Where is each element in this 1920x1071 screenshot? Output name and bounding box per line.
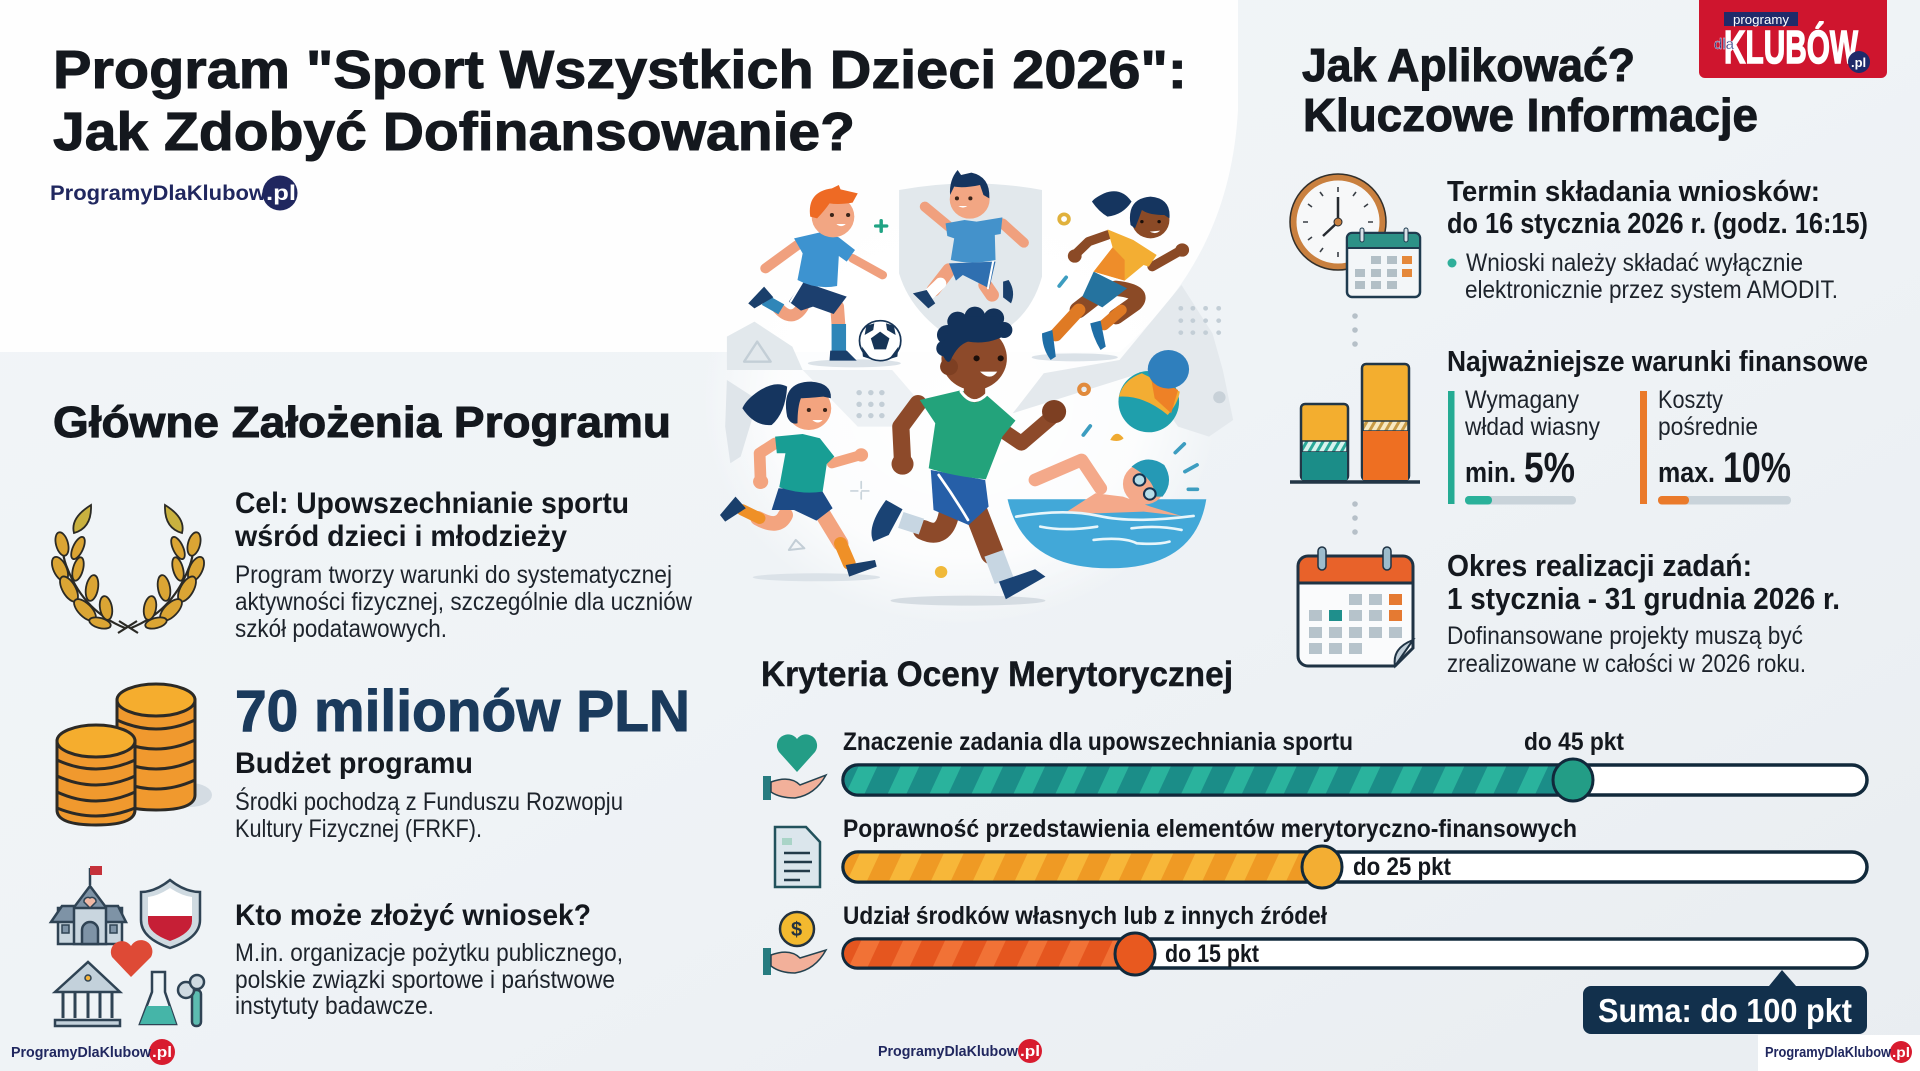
criterion: udział środków (763, 902, 1867, 975)
logo: Programy dla Klubów red badge: programy (1733, 12, 1789, 27)
child: boy centre top (913, 170, 1024, 308)
criterion: znaczenie zadania: do 45 pkt (1524, 728, 1625, 756)
icon: coin in hand: $ (791, 919, 802, 941)
text block: budżet: Środki pochodzą z Funduszu Rozwopju (235, 786, 623, 816)
icon: eligible institutions (51, 866, 204, 1026)
criterion: udział środków: Udział środków własnych lub z innych źródeł (843, 902, 1327, 930)
text block: okres realizacji: Dofinansowane projekty muszą być (1447, 622, 1803, 650)
text block: cel programu: aktywności fizycznej, szczególnie dla uczniów (235, 588, 693, 616)
card: koszty pośrednie (1640, 386, 1791, 504)
logo: ProgramyDlaKlubow.pl top: ProgramyDlaKlubow (50, 182, 267, 205)
icon: school (51, 866, 126, 944)
card: koszty pośrednie: 10% (1723, 444, 1791, 492)
text block: okres realizacji: 1 stycznia - 31 grudnia 2026 r. (1447, 581, 1840, 616)
text block: termin składania wniosków (1447, 176, 1868, 304)
icon: heart in hand (763, 734, 826, 800)
heading: Jak aplikować (1302, 39, 1758, 141)
text block: cel programu: Program tworzy warunki do systematycznej (235, 561, 672, 589)
child: boy with ball (748, 185, 901, 367)
text block: cel programu: Cel: Upowszechnianie sportu (235, 487, 629, 520)
text block: kto może złożyć wniosek: M.in. organizacje pożytku publicznego, (235, 939, 623, 967)
text block: kto może złożyć wniosek (235, 899, 623, 1020)
card: wkład własny: włdad wiasny (1464, 413, 1600, 441)
logo: footer left (11, 1039, 175, 1065)
dot grids (856, 306, 1221, 418)
callout: suma punktów: Suma: do 100 pkt (1598, 992, 1852, 1029)
text block: okres realizacji (1447, 548, 1840, 678)
icon: heart (111, 940, 152, 977)
icon: clock and calendar (1290, 174, 1420, 297)
text block: kto może złożyć wniosek: instytuty badawcze. (235, 992, 434, 1020)
criterion: udział środków: do 15 pkt (1165, 940, 1260, 968)
logo: footer right (1758, 1035, 1920, 1071)
icon: large calendar (1298, 547, 1413, 666)
text block: cel programu (234, 487, 693, 643)
text block: kto może złożyć wniosek: Kto może złożyć wniosek? (235, 899, 591, 932)
text block: termin składania wniosków: do 16 stycznia 2026 r. (godz. 16:15) (1447, 208, 1868, 240)
text block: cel programu: szkół podatawowych. (235, 615, 447, 643)
logo: Programy dla Klubów red badge: dla (1714, 36, 1735, 53)
logo: footer centre: .pl (1020, 1043, 1040, 1060)
criterion: poprawność: Poprawność przedstawienia elementów merytoryczno-finansowych (843, 815, 1577, 843)
text block: budżet: Budżet programu (235, 747, 473, 780)
card: koszty pośrednie: pośrednie (1658, 413, 1758, 441)
icon: laurel wreath (49, 505, 207, 633)
icon: bank (55, 962, 120, 1026)
illustration: children doing sports (720, 170, 1233, 606)
text block: okres realizacji: Okres realizacji zadań: (1447, 548, 1752, 583)
icon: coin stacks (57, 684, 212, 825)
connector dots (1352, 313, 1358, 535)
heading: warunki finansowe: Najważniejsze warunki finansowe (1447, 346, 1868, 378)
logo: footer right: ProgramyDlaKlubow (1765, 1044, 1891, 1061)
logo: footer centre (878, 1039, 1042, 1063)
logo: Programy dla Klubów red badge: .pl (1851, 55, 1866, 70)
small accents (851, 214, 1197, 578)
card: wkład własny: min. (1465, 457, 1516, 489)
text block: cel programu: wśród dzieci i młodzieży (234, 520, 567, 553)
heading: Główne Założenia Programu: Główne Założenia Programu (53, 398, 671, 447)
card: koszty pośrednie: max. (1658, 457, 1715, 489)
icon: document (775, 827, 820, 887)
text block: budżet (235, 679, 690, 843)
criterion: poprawność (775, 815, 1867, 888)
icon: swim cap and ball (1118, 350, 1189, 432)
criterion: poprawność: do 25 pkt (1353, 853, 1452, 881)
title: Jak Zdobyć Dofinansowanie? (53, 102, 855, 162)
text block: termin składania wniosków: elektronicznie przez system AMODIT. (1465, 276, 1838, 304)
card: koszty pośrednie: Koszty (1658, 386, 1723, 414)
logo: Programy dla Klubów red badge (1699, 0, 1887, 78)
text block: budżet: Kultury Fizycznej (FRKF). (235, 815, 482, 843)
text block: termin składania wniosków: Termin składania wniosków: (1447, 176, 1820, 208)
logo: footer left: .pl (152, 1044, 172, 1061)
icon: finance bars (1290, 364, 1420, 482)
icon: shield polish flag (141, 880, 200, 948)
text block: kto może złożyć wniosek: polskie związki sportowe i państwowe (235, 966, 615, 994)
heading: kryteria oceny: Kryteria Oceny Merytorycznej (761, 655, 1233, 694)
text block: termin składania wniosków: Wnioski należy składać wyłącznie (1466, 249, 1803, 277)
icon: flask (140, 972, 204, 1026)
title (53, 40, 1187, 162)
child: main runner (871, 307, 1066, 606)
card: wkład własny (1448, 386, 1600, 504)
heading: Jak aplikować: Jak Aplikować? (1302, 39, 1635, 91)
logo: ProgramyDlaKlubow.pl top: .pl (266, 182, 296, 205)
child: running girl left (720, 382, 880, 581)
white header panel (0, 0, 1238, 352)
callout: suma punktów (1583, 970, 1867, 1034)
title: Program "Sport Wszystkich Dzieci 2026": (53, 40, 1187, 100)
criterion: znaczenie zadania: Znaczenie zadania dla upowszechniania sportu (843, 728, 1353, 756)
card: wkład własny: 5% (1524, 444, 1575, 492)
logo: footer right: .pl (1892, 1044, 1910, 1060)
logo: footer centre: ProgramyDlaKlubow (878, 1043, 1018, 1060)
background decorative shapes (725, 183, 1233, 550)
child: swimmer in water (1008, 460, 1206, 568)
illustration glow (700, 175, 1220, 625)
logo: footer left: ProgramyDlaKlubow (11, 1044, 151, 1061)
text block: budżet: 70 milionów PLN (235, 679, 690, 744)
card: wkład własny: Wymagany (1465, 386, 1579, 414)
icon: coin in hand (763, 912, 826, 975)
heading: Jak aplikować: Kluczowe Informacje (1303, 89, 1758, 141)
logo: ProgramyDlaKlubow.pl top (50, 176, 298, 210)
criterion: znaczenie zadania (763, 728, 1867, 801)
text block: okres realizacji: zrealizowane w całości w 2026 roku. (1447, 650, 1806, 678)
child: running girl (1032, 191, 1189, 361)
